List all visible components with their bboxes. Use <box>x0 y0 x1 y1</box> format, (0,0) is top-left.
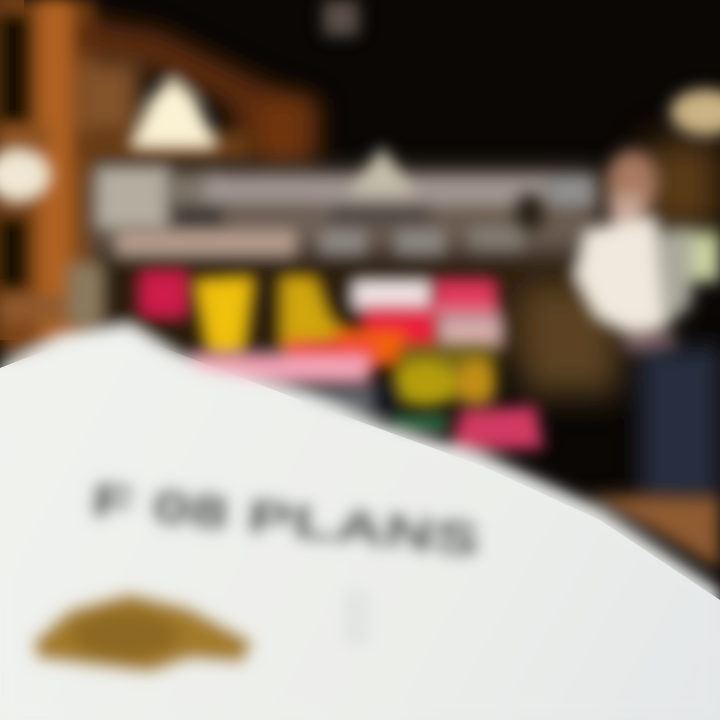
item: yellow-olive pack <box>280 276 354 354</box>
shirt <box>574 216 666 344</box>
colorful merchandise <box>139 270 544 452</box>
center pendant lamp <box>348 146 416 194</box>
item: rose top <box>434 280 496 312</box>
far arm, green-lit wall <box>676 232 720 282</box>
wooden table edge <box>585 495 720 570</box>
item: coral band <box>286 342 374 370</box>
background: dark room <box>90 140 720 395</box>
item: olive backdrop <box>395 345 495 403</box>
lamp: left pendant <box>130 76 218 148</box>
trousers <box>640 345 720 500</box>
item: red pack <box>139 270 189 318</box>
item: pink band <box>188 354 370 384</box>
item: yellow cluster <box>393 360 494 405</box>
blurred white sign <box>90 166 600 256</box>
item: yellow pack <box>194 276 254 354</box>
item: green strip <box>394 416 448 430</box>
wooden shelves, left <box>0 0 320 355</box>
golden coins pile <box>34 594 252 672</box>
item: red-pink band <box>363 314 437 350</box>
paper headline: F 08 PLANS <box>89 473 482 566</box>
item: dark spot <box>374 384 398 414</box>
item: magenta pack <box>451 406 544 452</box>
ceiling fixture <box>323 0 359 36</box>
item: pale right <box>438 316 502 348</box>
waist <box>622 330 678 354</box>
item: pale pink top <box>352 280 432 310</box>
neck and collar <box>610 195 644 235</box>
white paper sheet <box>0 323 720 720</box>
lamp: right glow <box>670 89 720 135</box>
head <box>606 150 658 214</box>
item: pink strip <box>365 306 497 318</box>
faint paper marks <box>345 590 369 645</box>
item: orange strip <box>333 330 407 366</box>
item: grey pack <box>296 386 380 414</box>
right arm <box>652 228 692 332</box>
shelf item: white bowl <box>0 149 50 201</box>
man in white shirt <box>574 150 720 500</box>
